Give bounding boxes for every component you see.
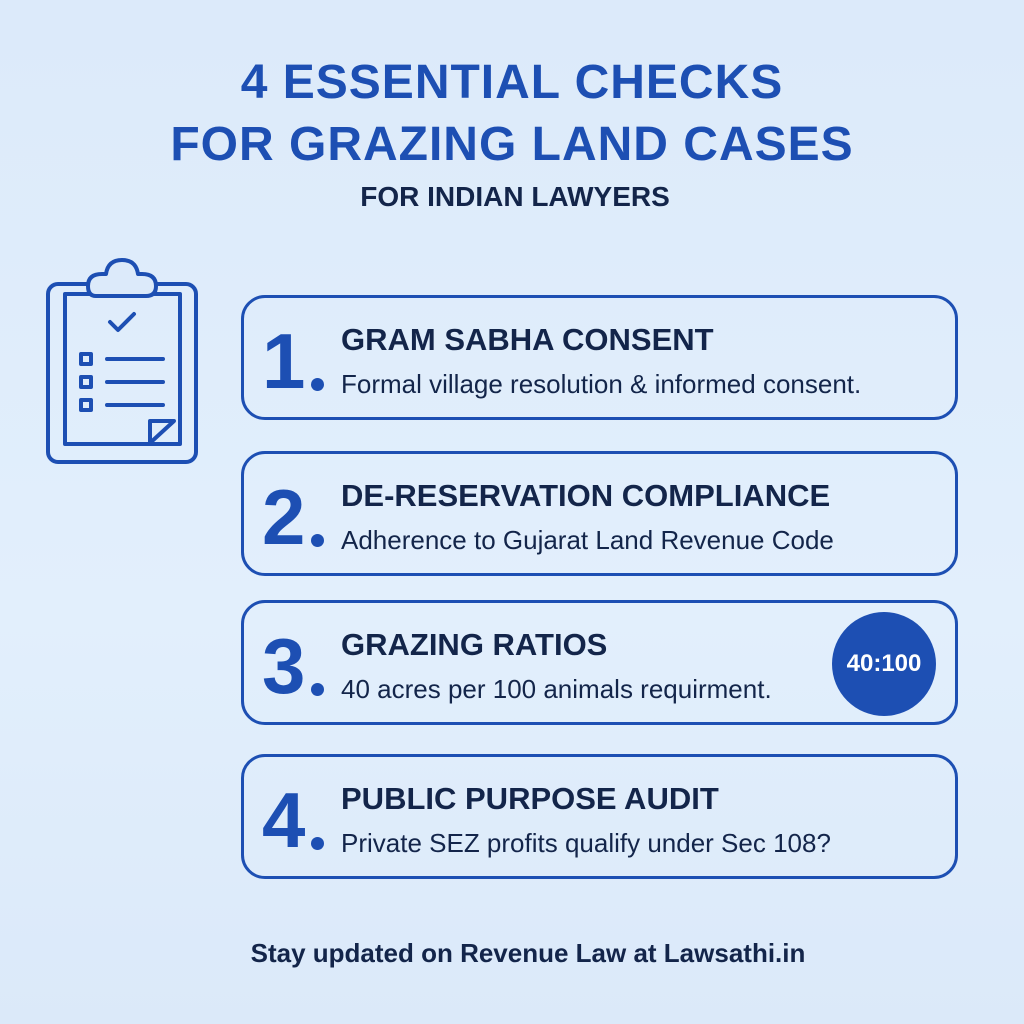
- footer: Stay updated on Revenue Law at Lawsathi.in: [251, 938, 805, 968]
- card 2: Adherence to Gujarat Land Revenue Code: [341, 525, 834, 555]
- card 3: GRAZING RATIOS: [341, 627, 607, 662]
- icon: clipboard: [46, 258, 198, 464]
- title: 4 ESSENTIAL CHECKS: [241, 56, 783, 109]
- card 1: GRAM SABHA CONSENT: [341, 322, 714, 357]
- card 4: Private SEZ profits qualify under Sec 108?: [341, 828, 831, 858]
- card 2: [241, 451, 958, 576]
- card 2: DE-RESERVATION COMPLIANCE: [341, 478, 830, 513]
- card 1: Formal village resolution & informed consent.: [341, 369, 861, 399]
- title: [170, 56, 854, 171]
- card 1: 1: [262, 317, 305, 405]
- card 1: [241, 295, 958, 420]
- card 4: 4: [262, 776, 305, 864]
- card 3: [241, 600, 958, 725]
- card 3: 3: [262, 622, 305, 710]
- subtitle: FOR INDIAN LAWYERS: [360, 181, 670, 212]
- card 2: 2: [262, 473, 305, 561]
- badge 40:100: 40:100: [847, 650, 921, 677]
- card 4: [241, 754, 958, 879]
- card 3: 40 acres per 100 animals requirment.: [341, 674, 772, 704]
- badge 40:100: [832, 612, 936, 716]
- card 4: PUBLIC PURPOSE AUDIT: [341, 781, 719, 816]
- title: FOR GRAZING LAND CASES: [170, 118, 854, 171]
